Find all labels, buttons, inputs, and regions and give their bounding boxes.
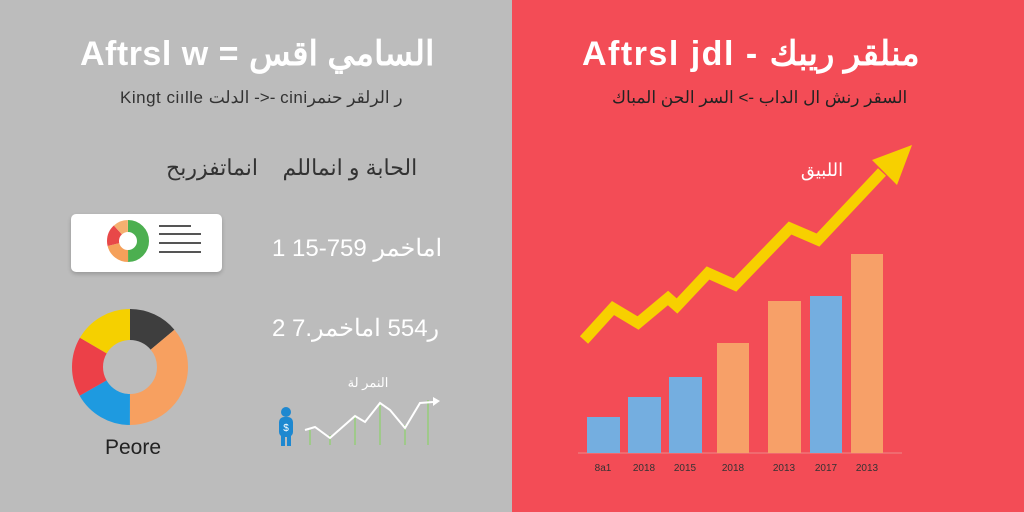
- bar chart with trend arrow: اللبيق: [801, 160, 843, 181]
- bar chart with trend arrow: 2013: [773, 463, 796, 474]
- mini line chart with person icon: النمر لة: [348, 375, 388, 391]
- bar chart with trend arrow: 2015: [674, 463, 697, 474]
- stat 2: 2 7.ر554 اماخمر: [272, 315, 439, 342]
- subtitle right: السقر رنش ال الداب -> السر الحن المباك: [612, 88, 907, 107]
- panel: right: [512, 0, 1024, 512]
- donut label: Peore: [105, 436, 161, 459]
- panel: left: [0, 0, 512, 512]
- bar chart with trend arrow: 2018: [722, 463, 745, 474]
- card with small donut: [71, 214, 222, 272]
- bar chart with trend arrow: 2018: [633, 463, 656, 474]
- headings left: الحابة و انماللم انماتفزربح: [166, 155, 417, 180]
- mini line chart with person icon: $: [283, 423, 289, 434]
- bar chart with trend arrow: [578, 145, 912, 474]
- donut chart: [72, 309, 188, 425]
- bar chart with trend arrow: 2017: [815, 463, 838, 474]
- bar chart with trend arrow: 2013: [856, 463, 879, 474]
- stat 1: 1 15-759 اماخمر: [272, 235, 442, 262]
- mini line chart with person icon: [279, 375, 440, 446]
- bar chart with trend arrow: 8a1: [595, 463, 612, 474]
- title left: Aftrsl w = السامي اقس: [80, 35, 434, 73]
- title right: Aftrsl jdl - منلقر ريبك: [582, 35, 920, 73]
- subtitle left: Kingt ciılle الدلت ->- ciniر الرلقر حنمر: [120, 88, 403, 107]
